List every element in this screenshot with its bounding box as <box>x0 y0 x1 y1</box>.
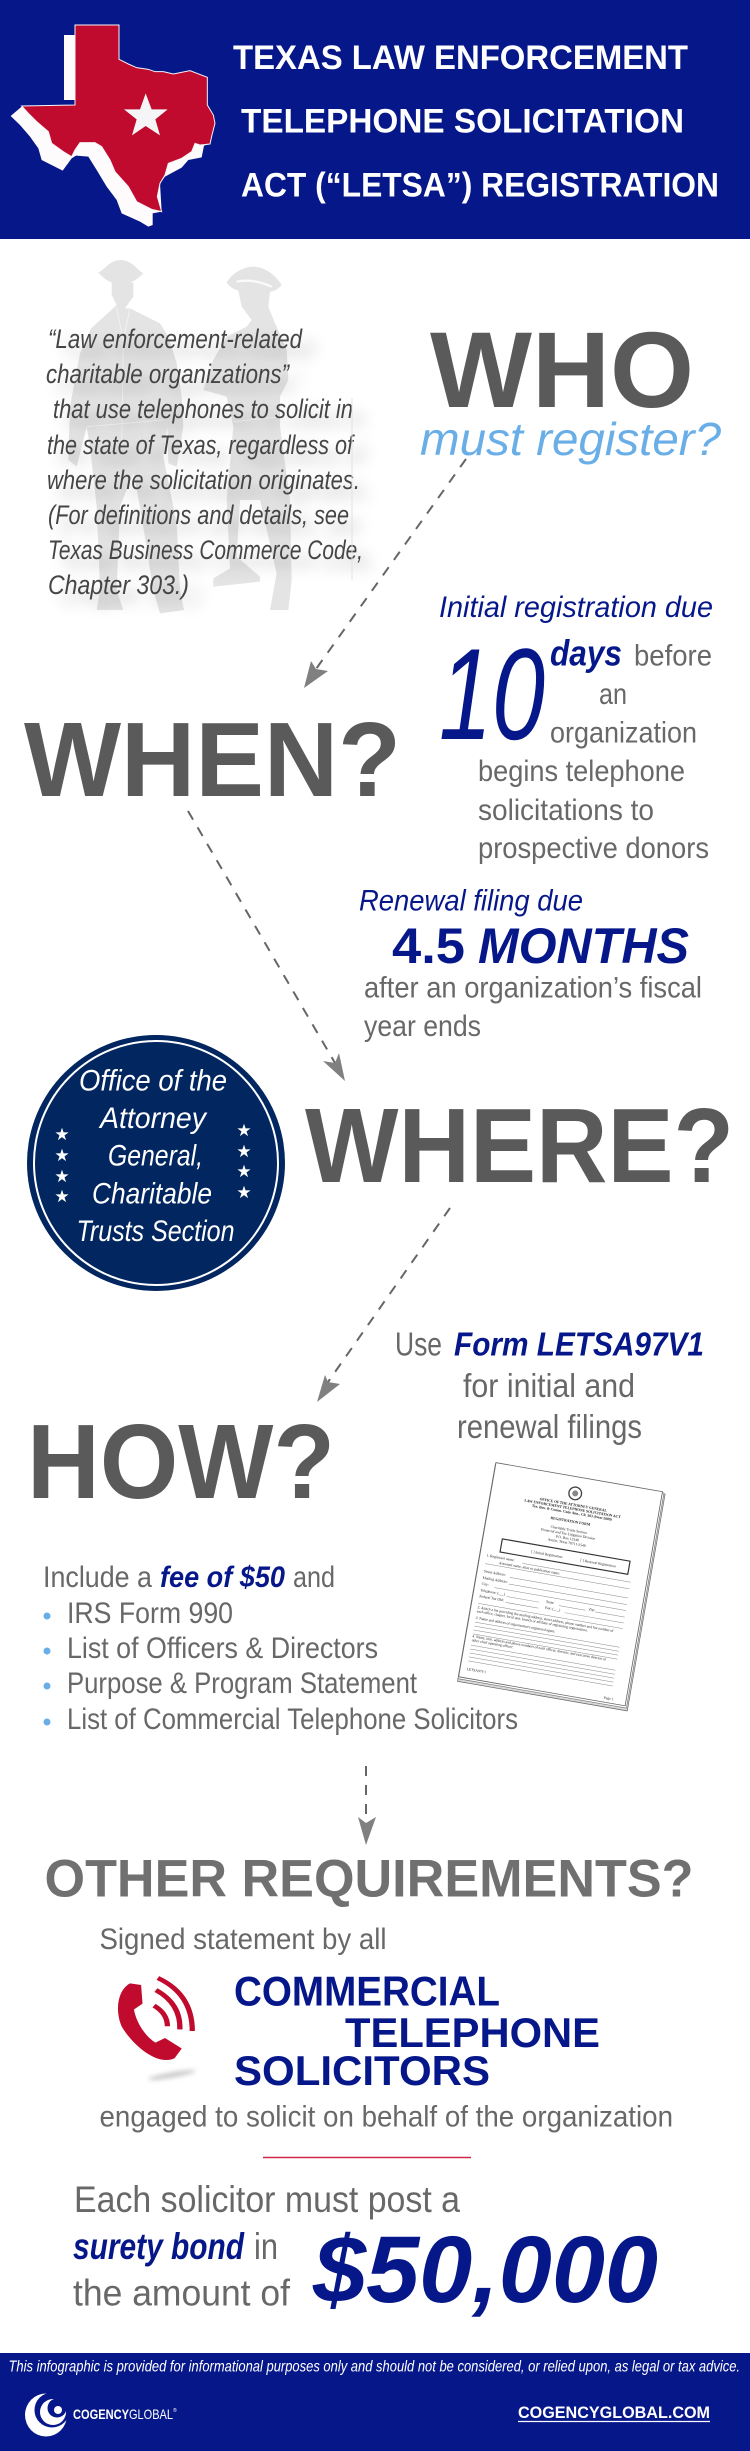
text block: surety bond: in <box>254 2226 278 2267</box>
text block: fee and list of attachments: List of Commercial Telephone Solicitors <box>67 1703 518 1736</box>
text block: renewal filing: after an organization’s fiscal <box>364 972 702 1004</box>
website link: COGENCYGLOBAL.COM <box>518 2403 710 2422</box>
text block: renewal filing <box>359 884 702 1043</box>
text block: who must register description: “Law enforcement-related <box>48 324 303 354</box>
text block: who must register description <box>46 324 363 600</box>
text block: surety bond: $50,000 <box>312 2217 658 2323</box>
text block: use form <box>395 1326 704 1445</box>
text block: initial registration: an <box>599 678 627 711</box>
illustration: registration form document: State: <box>546 1600 555 1605</box>
icon: stars: ★ <box>54 1125 70 1145</box>
illustration: registration form document: [ ] Initial Registration <box>531 1550 563 1559</box>
logo: Cogency Global: COGENCY <box>73 2406 130 2422</box>
footer <box>0 2353 750 2451</box>
illustration: registration form document: Street Address: <box>483 1569 506 1577</box>
text block: who must register description: that use telephones to solicit in <box>53 394 353 424</box>
icon: stars: ★ <box>236 1121 252 1141</box>
arrow: when to where <box>188 811 345 1081</box>
text block: signed statement <box>100 1923 673 2134</box>
illustration: registration form document: 2. Attach a list providing the mailing address, street address, phone number and fax number of <box>477 1605 614 1634</box>
arrow: who to when <box>304 459 466 688</box>
illustration: registration form document: LETSA97V1 <box>466 1667 486 1674</box>
badge: office of the attorney general: Office of the <box>79 1064 227 1098</box>
arrow: where to how <box>317 1208 450 1402</box>
text block: who must register description: Texas Business Commerce Code, <box>48 535 363 565</box>
text block: initial registration: solicitations to <box>478 794 654 827</box>
heading: how: HOW? <box>27 1403 335 1521</box>
illustration: registration form document <box>458 1463 665 1711</box>
text block: surety bond: surety bond <box>73 2226 245 2267</box>
text block: use form: for initial and <box>463 1367 635 1404</box>
text block: who must register description: (For definitions and details, see <box>48 500 349 530</box>
icon: stars: ★ <box>236 1142 252 1162</box>
text block: fee and list of attachments <box>43 1561 518 1736</box>
illustration: registration form document: City: <box>481 1582 489 1587</box>
text block: initial registration: organization <box>550 716 697 750</box>
icon: stars: ★ <box>236 1183 252 1203</box>
illustration: registration form document: REGISTRATION FORM <box>550 1516 591 1527</box>
text block: initial registration <box>439 591 713 865</box>
badge: office of the attorney general: General, <box>108 1140 203 1172</box>
text block: renewal filing: MONTHS <box>478 918 689 974</box>
icon: red telephone <box>118 1978 196 2082</box>
header banner <box>0 0 750 239</box>
illustration: registration form document: Assumed name, alias or publication name: <box>498 1561 560 1577</box>
text block: initial registration: prospective donors <box>478 832 709 865</box>
text block: use form: renewal filings <box>457 1408 642 1445</box>
illustration: registration form document: OFFICE OF THE ATTORNEY GENERAL <box>539 1497 608 1513</box>
title <box>233 39 719 204</box>
text block: renewal filing: Renewal filing due <box>359 884 583 918</box>
icon: Texas map with star <box>11 25 215 227</box>
text block: fee and list of attachments: List of Officers & Directors <box>67 1632 378 1665</box>
icon: stars: ★ <box>54 1187 70 1207</box>
text block: initial registration: Initial registration due <box>439 591 713 624</box>
illustration: registration form document: each office, chapter, local unit, branch or affiliate of registering organization. <box>476 1609 588 1634</box>
text block: initial registration: days <box>550 632 622 674</box>
illustration: registration form document: 1. Registrant name: <box>486 1553 515 1562</box>
arrow: how to other requirements <box>358 1766 376 1845</box>
text block: signed statement: SOLICITORS <box>234 2047 490 2094</box>
icon: stars: ★ <box>236 1162 252 1182</box>
text block: who must register description: where the solicitation originates. <box>47 465 360 495</box>
text block: signed statement: engaged to solicit on behalf of the organization <box>100 2100 673 2134</box>
text block: use form: Use <box>395 1326 442 1362</box>
illustration: registration form document: Financial and Tax Litigation Division <box>541 1527 596 1541</box>
illustration: registration form document: Tex. Bus. & Comm. Code Ann., Ch. 303 (West 2009) <box>532 1504 613 1522</box>
text block: initial registration: begins telephone <box>478 755 685 788</box>
text block: who must register description: Chapter 303.) <box>48 570 189 600</box>
illustration: registration form document: P.O. Box 12548 <box>556 1534 579 1542</box>
text block: renewal filing: 4.5 <box>392 918 465 974</box>
title: TELEPHONE SOLICITATION <box>241 102 684 140</box>
illustration: registration form document: 3. Name and address of organization's registered agent: <box>475 1616 556 1634</box>
text block: initial registration: 10 <box>439 621 545 767</box>
logo: Cogency Global: ® <box>173 2407 177 2414</box>
text block: who must register description: the state of Texas, regardless of <box>47 430 355 460</box>
illustration: registration form document: Charitable Trusts Section <box>550 1525 588 1535</box>
illustration: registration form document: Austin, Texas 78711-2548 <box>547 1537 586 1549</box>
text block: signed statement: COMMERCIAL <box>234 1968 500 2014</box>
icon: stars <box>54 1121 252 1207</box>
illustration: registration form document: 4. Name, title, address and phone numbers of each officer, director, and executive director or <box>472 1634 607 1663</box>
text block: initial registration: before <box>634 640 712 672</box>
text block: renewal filing: year ends <box>364 1010 481 1043</box>
illustration: registration form document: Fax: (___) <box>545 1606 561 1612</box>
heading: who must register: must register? <box>420 413 721 465</box>
text block: fee and list of attachments: IRS Form 990 <box>67 1597 233 1630</box>
illustration: registration form document: LAW ENFORCEMENT TELEPHONE SOLICITATION ACT <box>524 1498 621 1519</box>
text block: surety bond: Each solicitor must post a <box>74 2179 460 2220</box>
heading: who must register <box>420 309 721 465</box>
text block: surety bond: the amount of <box>73 2272 291 2314</box>
heading: other requirements: OTHER REQUIREMENTS? <box>44 1850 694 1908</box>
heading: when: WHEN? <box>24 701 401 819</box>
title: ACT (“LETSA”) REGISTRATION <box>241 166 719 204</box>
illustration: registration form document: Telephone: (___) <box>480 1588 506 1597</box>
text block: signed statement: Signed statement by all <box>100 1923 386 1956</box>
icon: stars: ★ <box>54 1146 70 1166</box>
heading: who must register: WHO <box>430 309 694 430</box>
badge: office of the attorney general: Trusts Section <box>76 1215 234 1248</box>
text block: use form: Form LETSA97V1 <box>454 1326 704 1362</box>
badge: office of the attorney general: Charitable <box>92 1178 212 1210</box>
text block: surety bond <box>73 2179 658 2323</box>
illustration: police officers silhouettes <box>68 260 292 613</box>
badge: office of the attorney general <box>27 1035 285 1291</box>
illustration: registration form document: other chief operating officer: <box>471 1638 514 1649</box>
illustration: registration form document: Mailing Address: <box>482 1576 508 1584</box>
illustration: registration form document: Zip: <box>589 1607 595 1612</box>
badge: office of the attorney general: Attorney <box>98 1102 208 1135</box>
logo: Cogency Global <box>25 2392 177 2436</box>
text block: fee and list of attachments: Purpose & Program Statement <box>67 1667 418 1700</box>
text block: who must register description: charitable organizations” <box>46 359 290 389</box>
text block: fee and list of attachments: Include a <box>43 1561 152 1594</box>
text block: fee and list of attachments: and <box>293 1561 335 1594</box>
illustration: registration form document: Page 1 <box>604 1696 614 1701</box>
illustration: registration form document: [ ] Renewal Registration <box>580 1558 616 1568</box>
text block: fee and list of attachments: fee of $50 <box>160 1561 285 1594</box>
title: TEXAS LAW ENFORCEMENT <box>233 39 688 77</box>
logo: Cogency Global: GLOBAL <box>129 2406 173 2422</box>
icon: stars: ★ <box>54 1167 70 1187</box>
illustration: registration form document: Federal Tax ID#: <box>479 1594 504 1602</box>
text block: signed statement: TELEPHONE <box>345 2009 600 2056</box>
